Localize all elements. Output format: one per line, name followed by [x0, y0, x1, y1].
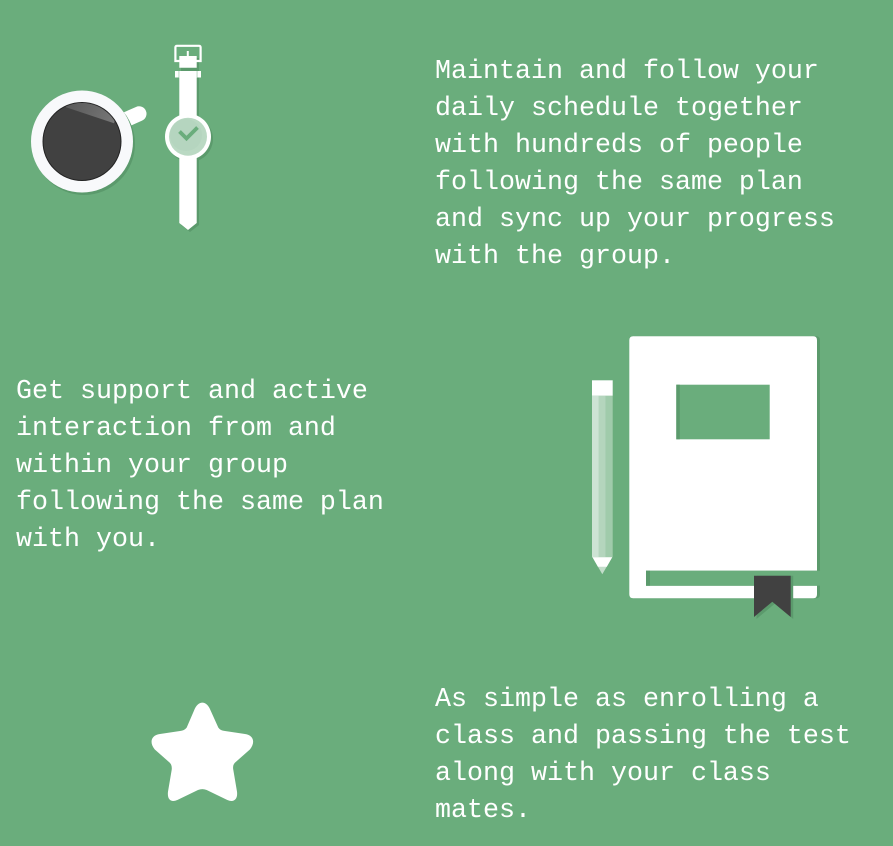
- text block: daily schedule: Maintain and follow your daily schedule together with hundreds of people following the same plan and sync up your progress with the group.: [435, 57, 835, 272]
- icon: coffee cup: [31, 90, 139, 195]
- text block: group support: Get support and active interaction from and within your group following the same plan with you.: [16, 377, 384, 555]
- icon: pencil: [592, 380, 613, 574]
- icon: wristwatch: [165, 46, 213, 232]
- text block: enrolling: As simple as enrolling a class and passing the test along with your class mates.: [435, 685, 851, 826]
- illustrations: [31, 44, 820, 801]
- icon: bookmark: [754, 576, 793, 619]
- icon: notebook: [629, 336, 821, 619]
- icon: star: [152, 703, 253, 801]
